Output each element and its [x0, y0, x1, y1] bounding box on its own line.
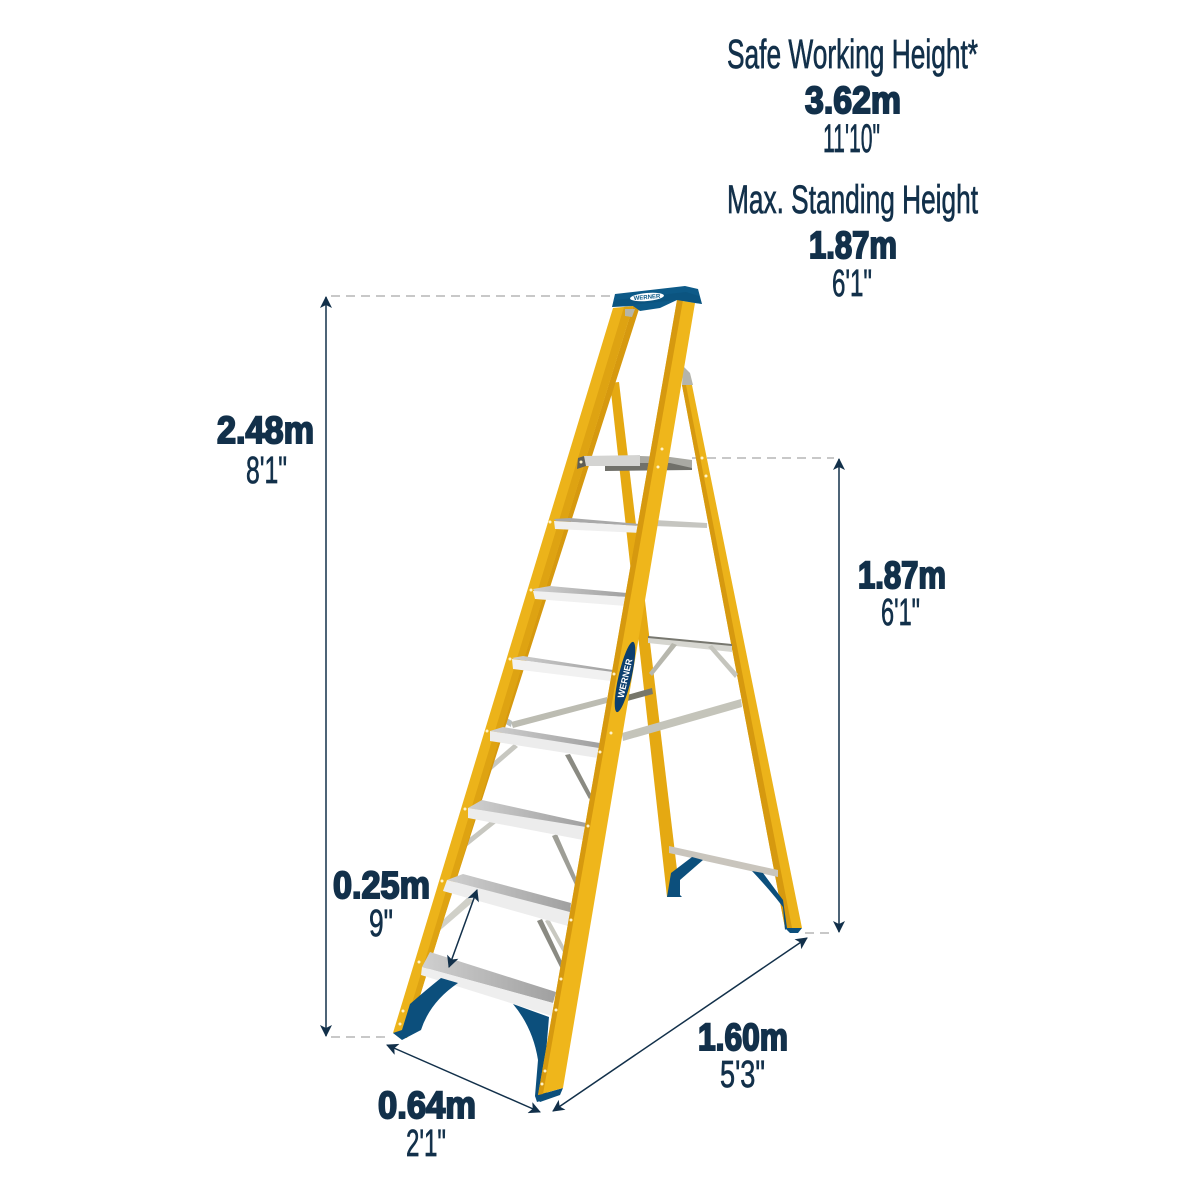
- label: width: 2'1": [406, 1123, 446, 1165]
- heading: max standing height: Max. Standing Height: [727, 178, 978, 222]
- heading: max standing height: [727, 178, 978, 305]
- label: overall height: [217, 410, 314, 492]
- heading: safe working height: 3.62m: [805, 80, 901, 122]
- stile label: [611, 640, 639, 714]
- heading: safe working height: [727, 31, 978, 161]
- label: depth: [698, 1017, 788, 1096]
- front left stile: [393, 306, 640, 1038]
- label: platform height: 6'1": [881, 592, 920, 634]
- back right leg: [682, 366, 802, 928]
- label: platform height: [858, 555, 946, 634]
- aluminium treads: [421, 455, 640, 1016]
- platform cap: WERNER: [634, 294, 661, 302]
- heading: max standing height: 1.87m: [809, 225, 897, 267]
- stile label: WERNER: [616, 657, 635, 699]
- dimension arrows: [326, 297, 839, 1112]
- ladder: [393, 286, 802, 1102]
- heading: max standing height: 6'1": [832, 263, 872, 305]
- label: width: 0.64m: [378, 1085, 476, 1127]
- back left leg: [610, 382, 680, 897]
- front feet: [393, 978, 563, 1102]
- label: width: [378, 1085, 476, 1165]
- label: platform height: 1.87m: [858, 555, 946, 597]
- front right stile: [538, 300, 695, 1095]
- dashed extension lines: [331, 296, 834, 1037]
- label: depth: 5'3": [720, 1054, 765, 1096]
- label: step spacing: 0.25m: [333, 865, 430, 907]
- rear bars and braces: [605, 456, 778, 877]
- under-tread struts: [432, 697, 607, 969]
- platform cap: [612, 286, 702, 311]
- heading: safe working height: 11'10": [823, 117, 880, 161]
- label: overall height: 2.48m: [217, 410, 314, 452]
- rear feet: [667, 857, 802, 933]
- label: step spacing: 9": [369, 903, 393, 945]
- label: depth: 1.60m: [698, 1017, 788, 1059]
- heading: safe working height: Safe Working Height*: [727, 31, 978, 77]
- label: overall height: 8'1": [246, 450, 287, 492]
- label: step spacing: [333, 865, 430, 945]
- rivets: [398, 448, 708, 1086]
